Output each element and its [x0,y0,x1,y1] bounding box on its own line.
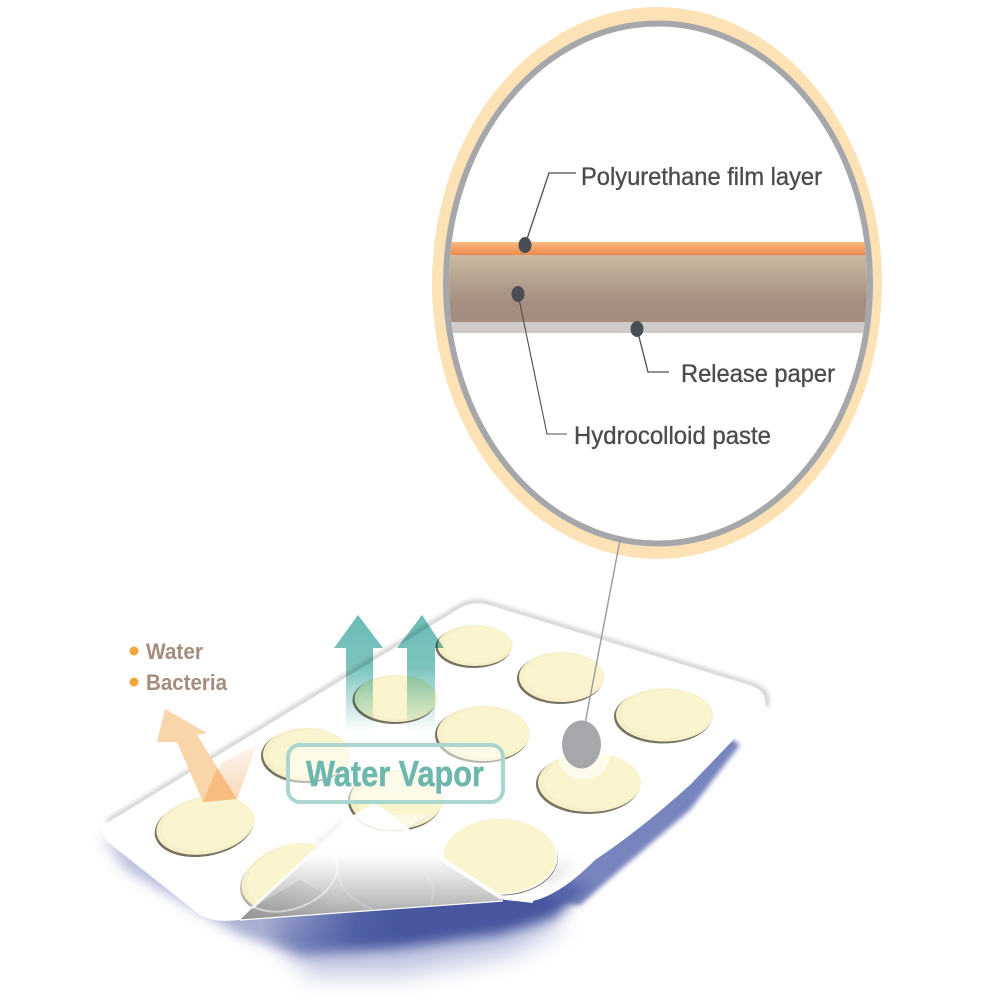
disc 7 [261,728,350,783]
disc 2 [517,652,604,704]
infographic: hydrocolloid patch structure [100,7,882,988]
label: hydrocolloid paste [512,286,771,450]
ghost discs seen through the flap [231,830,347,924]
layer: hydrocolloid paste [446,255,870,322]
soft shading beside the fold [255,822,575,905]
white halo [558,754,610,780]
flap white edges [252,805,373,908]
disc 9 [150,789,259,864]
water vapor label box: Water Vapor [306,753,484,794]
patch sheet [103,603,765,921]
legend: water, bacteria: Water [146,639,203,664]
disc 10 on curled corner [373,805,558,901]
disc 1 [436,625,512,668]
legend: water, bacteria [130,639,228,695]
label: hydrocolloid paste: Hydrocolloid paste [574,422,771,450]
disc 6 [536,753,641,814]
label: release paper [630,321,835,388]
patch sheet edge shadow [107,602,767,822]
disc 5 [435,706,530,763]
adhesive discs [150,625,713,925]
label: polyurethane film layer [518,163,822,253]
magnified circle [432,7,882,559]
disc 11 [230,830,347,925]
arrows: water vapor [334,615,444,732]
curled fold [231,805,503,924]
water vapor label box [288,745,503,802]
grey spot [562,720,601,768]
layer: polyurethane film [446,242,870,255]
legend: water, bacteria: Bacteria [146,670,228,695]
arrow: water and bacteria [157,709,257,802]
label: polyurethane film layer: Polyurethane film layer [581,163,822,191]
blue shadow under patch [100,730,740,975]
disc 4 [352,675,438,724]
label: release paper: Release paper [681,360,835,388]
disc 8 [348,770,443,831]
pointer line and grey spot [558,540,620,780]
layer: release paper [446,322,870,333]
disc 3 [614,688,713,744]
